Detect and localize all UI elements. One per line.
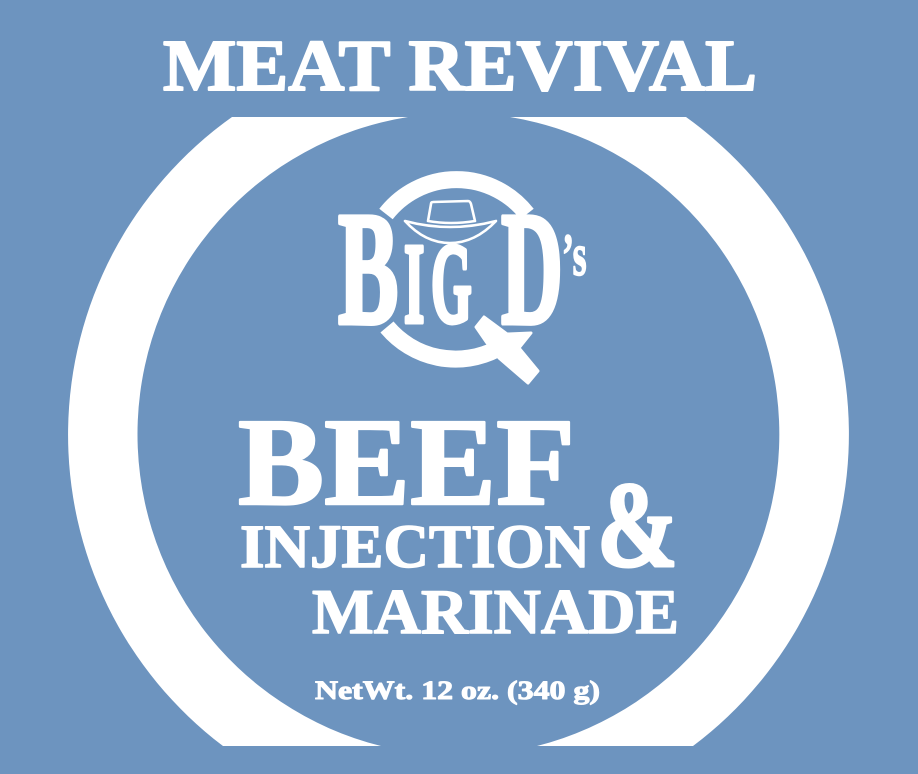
logo letters: G <box>431 222 472 348</box>
BEEF: BEEF <box>238 394 575 532</box>
logo letters: B <box>338 180 399 359</box>
logo Q tail <box>476 317 538 383</box>
logo letters <box>338 179 587 359</box>
net weight: NetWt. 12 oz. (340 g) <box>315 676 600 705</box>
product name <box>238 394 679 647</box>
logo letters: ’s <box>562 222 587 288</box>
logo Q ring <box>386 180 527 359</box>
logo: Big D's Q <box>338 179 587 383</box>
logo letters: I <box>404 222 424 348</box>
white ring frame <box>68 117 849 746</box>
INJECTION: INJECTION <box>240 514 590 581</box>
ampersand: & <box>597 458 678 593</box>
icon: hat <box>405 201 496 243</box>
title: MEAT REVIVAL <box>163 25 757 106</box>
logo letters: D <box>501 179 563 359</box>
MARINADE: MARINADE <box>312 577 679 647</box>
